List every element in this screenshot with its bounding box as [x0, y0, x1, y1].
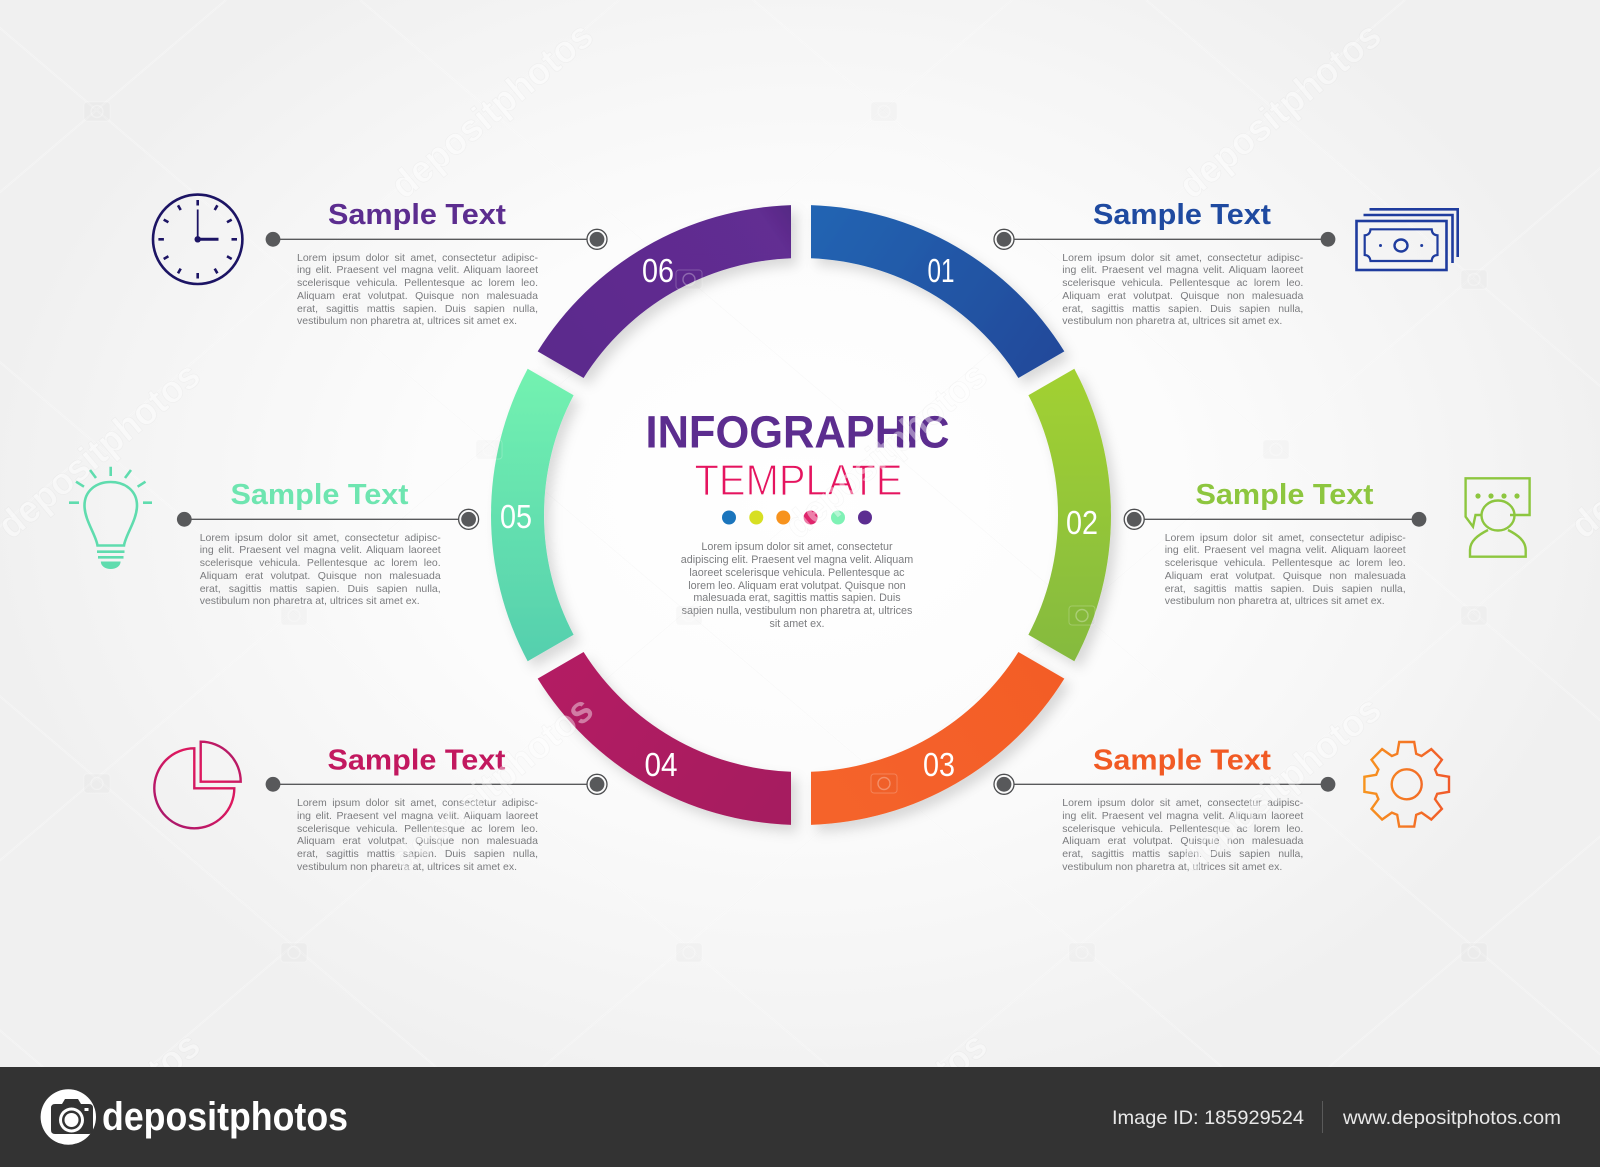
centre description text	[681, 541, 913, 630]
connector line	[994, 229, 1335, 249]
icon: light bulb	[69, 467, 152, 569]
centre description text: malesuada erat, sagittis mattis sapien. Duis	[693, 592, 901, 604]
centre title block	[646, 407, 950, 524]
text block	[297, 252, 538, 327]
segment 03	[811, 652, 1064, 825]
connector line	[177, 509, 479, 529]
text block: erat, sagittis mattis sapien. Duis sapien nulla,	[297, 303, 538, 315]
title: INFOGRAPHIC: INFOGRAPHIC	[646, 407, 950, 458]
text block: Lorem ipsum dolor sit amet, consectetur adipisc-	[297, 797, 538, 809]
heading: Sample Text	[1093, 199, 1271, 231]
text block: vestibulum non pharetra at, ultrices sit amet ex.	[200, 595, 420, 607]
text block: Aliquam erat volutpat. Quisque non malesuada	[200, 570, 441, 582]
panel: 04 chart	[153, 740, 608, 873]
centre description text: sapien nulla, vestibulum non pharetra at, ultrices	[682, 605, 912, 617]
heading: Sample Text	[1196, 479, 1374, 511]
heading: Sample Text	[230, 479, 409, 511]
segment 04	[538, 652, 791, 825]
text block: Lorem ipsum dolor sit amet, consectetur adipisc-	[1062, 252, 1303, 264]
icon: person with speech bubble	[1466, 478, 1530, 557]
logo: camera badge	[41, 1089, 96, 1145]
text block: scelerisque vehicula. Pellentesque ac lorem leo.	[297, 823, 538, 835]
divider	[1322, 1101, 1324, 1133]
connector line	[994, 774, 1335, 794]
text block: scelerisque vehicula. Pellentesque ac lorem leo.	[1062, 277, 1303, 289]
text block: Aliquam erat volutpat. Quisque non malesuada	[1062, 835, 1303, 847]
heading: Sample Text	[328, 744, 506, 776]
text block: ing elit. Praesent vel magna velit. Aliquam laoreet	[1165, 544, 1406, 556]
centre description text: adipiscing elit. Praesent vel magna velit. Aliquam	[681, 554, 913, 566]
heading: Sample Text	[328, 199, 506, 231]
text block: Lorem ipsum dolor sit amet, consectetur adipisc-	[200, 532, 441, 544]
panel: 06 time	[152, 193, 608, 327]
segment 04: 04	[644, 746, 678, 783]
panel: 05 idea	[69, 466, 480, 607]
text block: ing elit. Praesent vel magna velit. Aliquam laoreet	[297, 810, 538, 822]
text block: erat, sagittis mattis sapien. Duis sapien nulla,	[1062, 303, 1303, 315]
segment 01	[811, 205, 1064, 378]
segment 02	[1028, 369, 1111, 661]
text block: Aliquam erat volutpat. Quisque non malesuada	[297, 835, 538, 847]
text block	[297, 797, 538, 873]
text block: Lorem ipsum dolor sit amet, consectetur adipisc-	[1165, 532, 1406, 544]
logo: wordmark: depositphotos	[102, 1095, 348, 1139]
text block: ing elit. Praesent vel magna velit. Aliquam laoreet	[1062, 810, 1303, 822]
text block: vestibulum non pharetra at, ultrices sit amet ex.	[1062, 315, 1282, 327]
text block: erat, sagittis mattis sapien. Duis sapien nulla,	[200, 583, 441, 595]
text block: ing elit. Praesent vel magna velit. Aliquam laoreet	[1062, 264, 1303, 276]
text block: vestibulum non pharetra at, ultrices sit amet ex.	[1165, 595, 1385, 607]
text block: ing elit. Praesent vel magna velit. Aliquam laoreet	[297, 264, 538, 276]
segment 06	[538, 205, 791, 378]
panel: 01 money	[993, 199, 1459, 327]
text block: ing elit. Praesent vel magna velit. Aliquam laoreet	[200, 544, 441, 556]
text block: vestibulum non pharetra at, ultrices sit amet ex.	[297, 315, 517, 327]
centre description text: Lorem ipsum dolor sit amet, consectetur	[701, 541, 893, 553]
text block: Aliquam erat volutpat. Quisque non malesuada	[1165, 570, 1406, 582]
text block: Aliquam erat volutpat. Quisque non malesuada	[1062, 290, 1303, 302]
segment 01: 01	[928, 252, 954, 289]
website: www.depositphotos.com	[1342, 1107, 1561, 1129]
text block	[1164, 532, 1406, 607]
text block: erat, sagittis mattis sapien. Duis sapien nulla,	[1165, 583, 1406, 595]
text block: erat, sagittis mattis sapien. Duis sapien nulla,	[297, 848, 538, 860]
text block	[1062, 252, 1304, 327]
subtitle: TEMPLATE: TEMPLATE	[694, 456, 902, 505]
text block: erat, sagittis mattis sapien. Duis sapien nulla,	[1062, 848, 1303, 860]
six coloured dots	[722, 510, 872, 524]
image id: Image ID: 185929524	[1112, 1107, 1304, 1129]
panel: 03 settings	[993, 740, 1450, 873]
segment 02: 02	[1066, 504, 1098, 541]
segment 05: 05	[500, 498, 532, 535]
segment 06: 06	[642, 252, 674, 289]
centre description text: sit amet ex.	[770, 618, 824, 630]
connector line	[1124, 509, 1426, 529]
text block: vestibulum non pharetra at, ultrices sit amet ex.	[297, 861, 517, 873]
text block: scelerisque vehicula. Pellentesque ac lorem leo.	[200, 557, 441, 569]
text block	[1062, 797, 1304, 873]
watermark overlay: depositphotos	[1171, 14, 1390, 207]
text block: Lorem ipsum dolor sit amet, consectetur adipisc-	[297, 252, 538, 264]
centre description text: laoreet scelerisque vehicula. Pellentesque ac	[689, 567, 905, 579]
watermark overlay: depositphotos	[383, 14, 602, 207]
panel: 02 speaker	[1124, 477, 1531, 607]
connector line	[266, 229, 607, 249]
text block: scelerisque vehicula. Pellentesque ac lorem leo.	[1062, 823, 1303, 835]
footer bar	[0, 1067, 1600, 1167]
text block: vestibulum non pharetra at, ultrices sit amet ex.	[1062, 861, 1282, 873]
icon: banknotes	[1356, 209, 1458, 270]
centre description text: lorem leo. Aliquam erat volutpat. Quisque non	[688, 580, 906, 592]
segment 05	[491, 369, 574, 661]
segment 03: 03	[923, 746, 955, 783]
watermark overlay: depositphotos	[383, 688, 602, 881]
icon: pie chart	[154, 742, 241, 828]
text block: Lorem ipsum dolor sit amet, consectetur adipisc-	[1062, 797, 1303, 809]
connector line	[266, 774, 607, 794]
text block: Aliquam erat volutpat. Quisque non malesuada	[297, 290, 538, 302]
icon: gear	[1364, 742, 1449, 827]
text block: scelerisque vehicula. Pellentesque ac lorem leo.	[297, 277, 538, 289]
heading: Sample Text	[1093, 744, 1271, 776]
text block: scelerisque vehicula. Pellentesque ac lorem leo.	[1165, 557, 1406, 569]
text block	[200, 532, 441, 607]
watermark overlay: depositphotos	[777, 354, 996, 547]
icon: clock	[153, 195, 242, 284]
watermark overlay: depositphotos	[1171, 688, 1390, 881]
